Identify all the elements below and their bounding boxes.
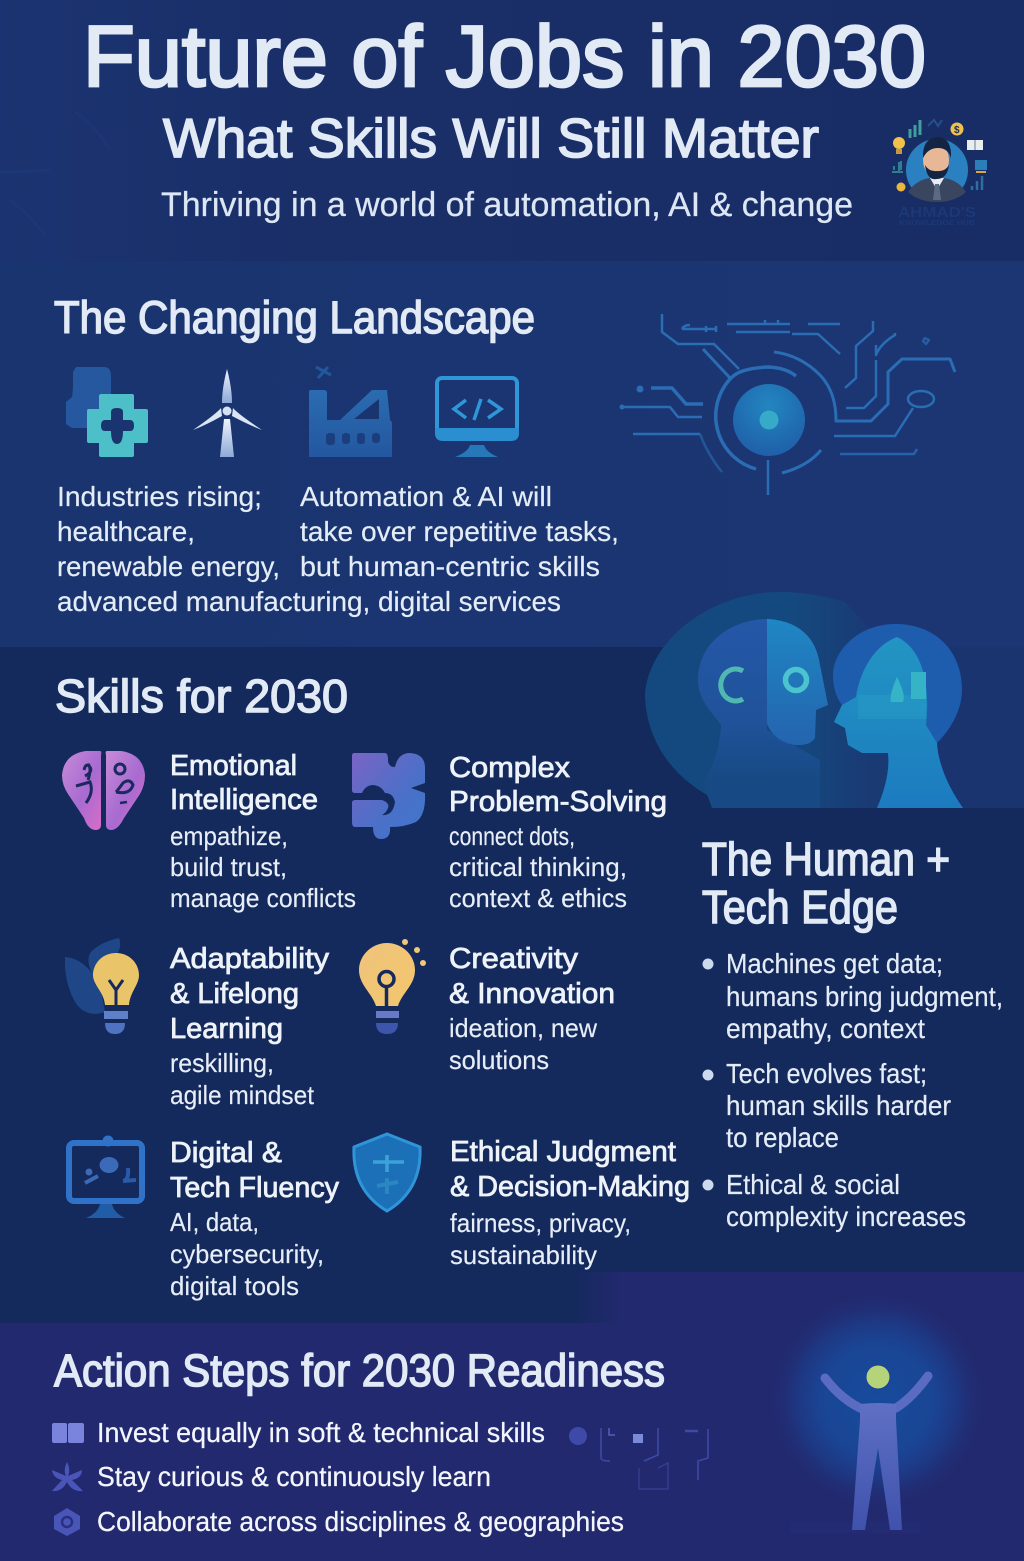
text: context & ethics [449,883,627,913]
bullet two: Tech evolves fast; [726,1058,927,1089]
panel: the human + tech edge [702,833,1003,1232]
text: & Decision-Making [450,1171,690,1203]
text: Tech Fluency [170,1172,339,1204]
human head [833,624,963,808]
heading: Tech Edge [702,881,898,933]
text: automation: Automation & AI will [300,481,552,512]
illustration: figure with raised arms [765,1288,989,1533]
skill: complex problem-solving [352,752,667,913]
icon: brain [62,751,145,830]
bullet three [702,1169,966,1232]
bullet one: empathy, context [726,1013,925,1044]
robot head [698,619,828,808]
logo: Ahmad's Knowledge Hub: $ [954,125,960,136]
icon: factory [309,367,392,457]
text: empathize, [170,821,288,851]
bullet three: Ethical & social [726,1169,900,1200]
icon: digital monitor [69,1136,142,1218]
text: build trust, [170,852,287,882]
bullet two: to replace [726,1122,839,1153]
text [449,752,667,913]
text [170,1137,339,1301]
text: manage conflicts [170,883,356,913]
heading: The Human + [702,833,950,885]
logo: Ahmad's Knowledge Hub [892,120,987,227]
heading: Action Steps for 2030 Readiness [54,1345,665,1396]
text: digital tools [170,1271,299,1301]
text: Digital & [170,1137,282,1169]
icon: code monitor [435,378,519,457]
skill: creativity [359,939,615,1075]
bullet two [702,1058,951,1153]
skill: adaptability [65,938,330,1110]
icon: book [52,1423,84,1443]
subtitle: What Skills Will Still Matter [163,107,819,169]
text: Intelligence [170,784,318,816]
panel: skills for 2030 [55,670,690,1301]
bullet one [702,948,1003,1044]
icon: shield [354,1134,420,1211]
text [449,943,615,1075]
text: & Innovation [449,978,615,1010]
bullet one: Machines get data; [726,948,943,979]
icon: bulb with leaves [65,938,139,1034]
text: Learning [170,1013,283,1045]
skill: digital fluency [69,1136,339,1301]
logo: Ahmad's Knowledge Hub: KNOWLEDGE HUB [899,220,975,227]
logo: Ahmad's Knowledge Hub: AHMAD'S [898,204,976,221]
text: solutions [449,1045,549,1075]
icon: hexagon [54,1508,80,1536]
text: Complex [449,752,571,784]
text: Ethical Judgment [450,1136,676,1168]
heading: Skills for 2030 [55,670,348,722]
icon: healthcare cross [66,367,148,457]
illustration: circuit chip [620,314,955,495]
panel: action steps [52,1288,989,1537]
text: AI, data, [170,1207,259,1237]
text: ideation, new [449,1013,597,1043]
tagline: Thriving in a world of automation, AI & change [161,186,853,224]
skill: ethical judgment [354,1134,690,1270]
text: fairness, privacy, [450,1208,631,1238]
text: automation: take over repetitive tasks, [300,516,619,547]
title: Future of Jobs in 2030 [83,9,926,105]
text: industries rising: Industries rising; [57,481,262,512]
step: invest: Invest equally in soft & technical skills [97,1417,545,1448]
text [450,1136,690,1270]
text [170,943,330,1110]
text: industries rising: healthcare, [57,516,195,547]
icon: flower [52,1462,83,1491]
text: automation: but human-centric skills [300,551,600,582]
text: cybersecurity, [170,1239,324,1269]
icon: puzzle [352,753,425,839]
text: & Lifelong [170,978,299,1010]
panel: header [83,9,987,227]
text: Emotional [170,750,297,782]
text: sustainability [450,1240,597,1270]
text: Problem-Solving [449,786,667,818]
text [170,750,356,913]
icon: wind turbine [193,369,262,457]
text: reskilling, [170,1048,274,1078]
heading: The Changing Landscape [54,292,535,343]
bullet two: human skills harder [726,1090,951,1121]
icon: idea bulb [359,939,426,1034]
step: stay curious: Stay curious & continuously learn [97,1461,491,1492]
skill: emotional intelligence [62,750,356,913]
panel: the changing landscape [54,292,955,617]
text: automation [300,481,619,582]
decorative tech brackets [569,1427,708,1489]
text: industries rising: renewable energy, [57,551,280,582]
bullet three: complexity increases [726,1201,966,1232]
text: Creativity [449,943,579,975]
heading [702,833,950,933]
bullet one: humans bring judgment, [726,981,1003,1012]
text: industries rising [57,481,561,617]
illustration: human and robot heads [645,592,963,808]
text: agile mindset [170,1080,315,1110]
step: collaborate: Collaborate across disciplines & geographies [97,1506,624,1537]
text: connect dots, [449,821,575,851]
text: Adaptability [170,943,330,975]
text: industries rising: advanced manufacturing, digital services [57,586,561,617]
text: critical thinking, [449,852,627,882]
